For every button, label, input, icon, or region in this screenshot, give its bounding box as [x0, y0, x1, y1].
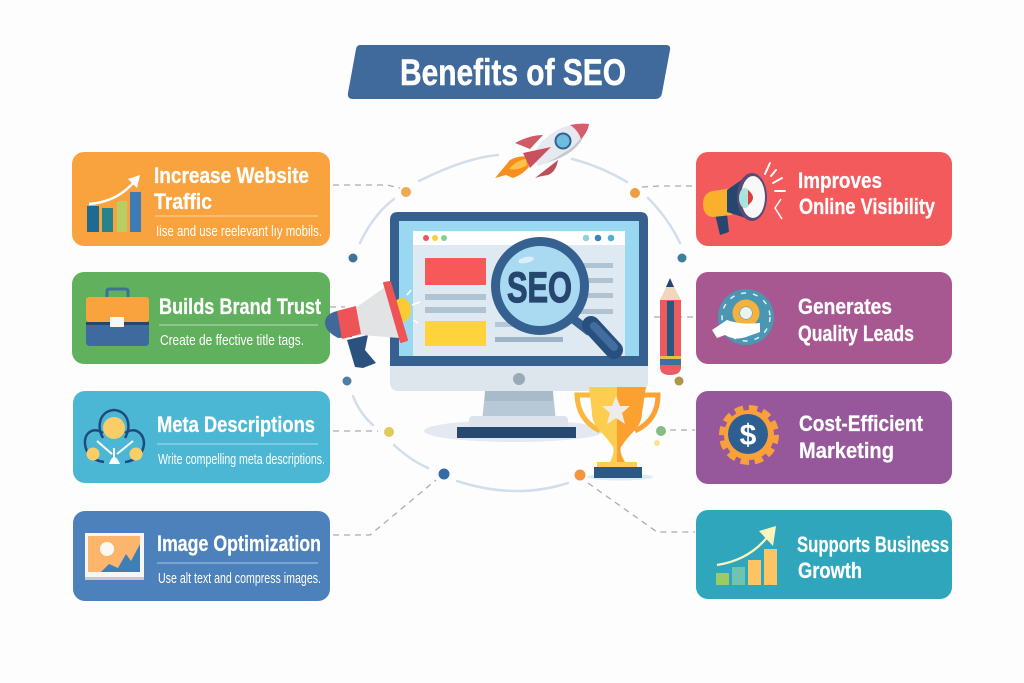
card: Supports Business Growth [696, 510, 952, 599]
card: Supports Business Growth: Growth [798, 558, 862, 583]
magnifying glass: SEO [507, 264, 572, 312]
card: Cost-Efficient Marketing: Cost-Efficient [799, 411, 924, 436]
card: Cost-Efficient Marketing: Marketing [799, 438, 894, 463]
icon: rocket [495, 124, 589, 178]
card: Cost-Efficient Marketing [696, 391, 952, 484]
card: Generates Quality Leads [696, 272, 952, 364]
card: Improves Online Visibility: Improves [798, 168, 882, 193]
icon: trophy [574, 387, 658, 480]
icon: rising bar chart [87, 175, 141, 232]
card: Improves Online Visibility [696, 152, 952, 246]
icon: people network [85, 410, 144, 464]
orbit ring and connectors [330, 155, 695, 535]
card: Builds Brand Trust: Builds Brand Trust [159, 294, 322, 319]
card: Generates Quality Leads: Generates [798, 294, 892, 319]
icon: briefcase [86, 289, 149, 346]
icon: pencil [660, 278, 681, 375]
title banner [348, 45, 670, 99]
card: Builds Brand Trust [72, 272, 330, 364]
card: Meta Descriptions: Meta Descriptions [157, 412, 315, 437]
icon: growth chart [716, 526, 777, 585]
card: Image Optimization: Use alt text and compress images. [158, 571, 321, 587]
icon: large megaphone [325, 282, 420, 368]
card: Supports Business Growth: Supports Business [797, 532, 949, 557]
icon: picture [85, 533, 144, 580]
card: Improves Online Visibility: Online Visibility [799, 194, 936, 219]
icon: megaphone [703, 163, 785, 235]
card: Increase Website Traffic: Increase Website [154, 163, 309, 188]
card: Generates Quality Leads: Quality Leads [798, 321, 914, 346]
card: Meta Descriptions: Write compelling meta descriptions. [158, 452, 325, 468]
card: Builds Brand Trust: Create de ffective title tags. [160, 333, 304, 349]
icon: dollar gear: $ [740, 419, 757, 452]
card: Increase Website Traffic [72, 152, 330, 246]
magnifying glass [496, 242, 614, 350]
card: Increase Website Traffic: Traffic [154, 189, 212, 214]
monitor [390, 212, 648, 442]
card: Increase Website Traffic: Iise and use reelevant lıy mobils. [156, 224, 322, 240]
browser window [413, 231, 625, 356]
title banner: Benefits of SEO [400, 52, 626, 93]
icon: dollar gear [722, 408, 776, 462]
icon: hand holding gear [712, 289, 774, 345]
card: Image Optimization [73, 511, 330, 601]
card: Image Optimization: Image Optimization [157, 531, 321, 556]
card: Meta Descriptions [73, 391, 330, 483]
